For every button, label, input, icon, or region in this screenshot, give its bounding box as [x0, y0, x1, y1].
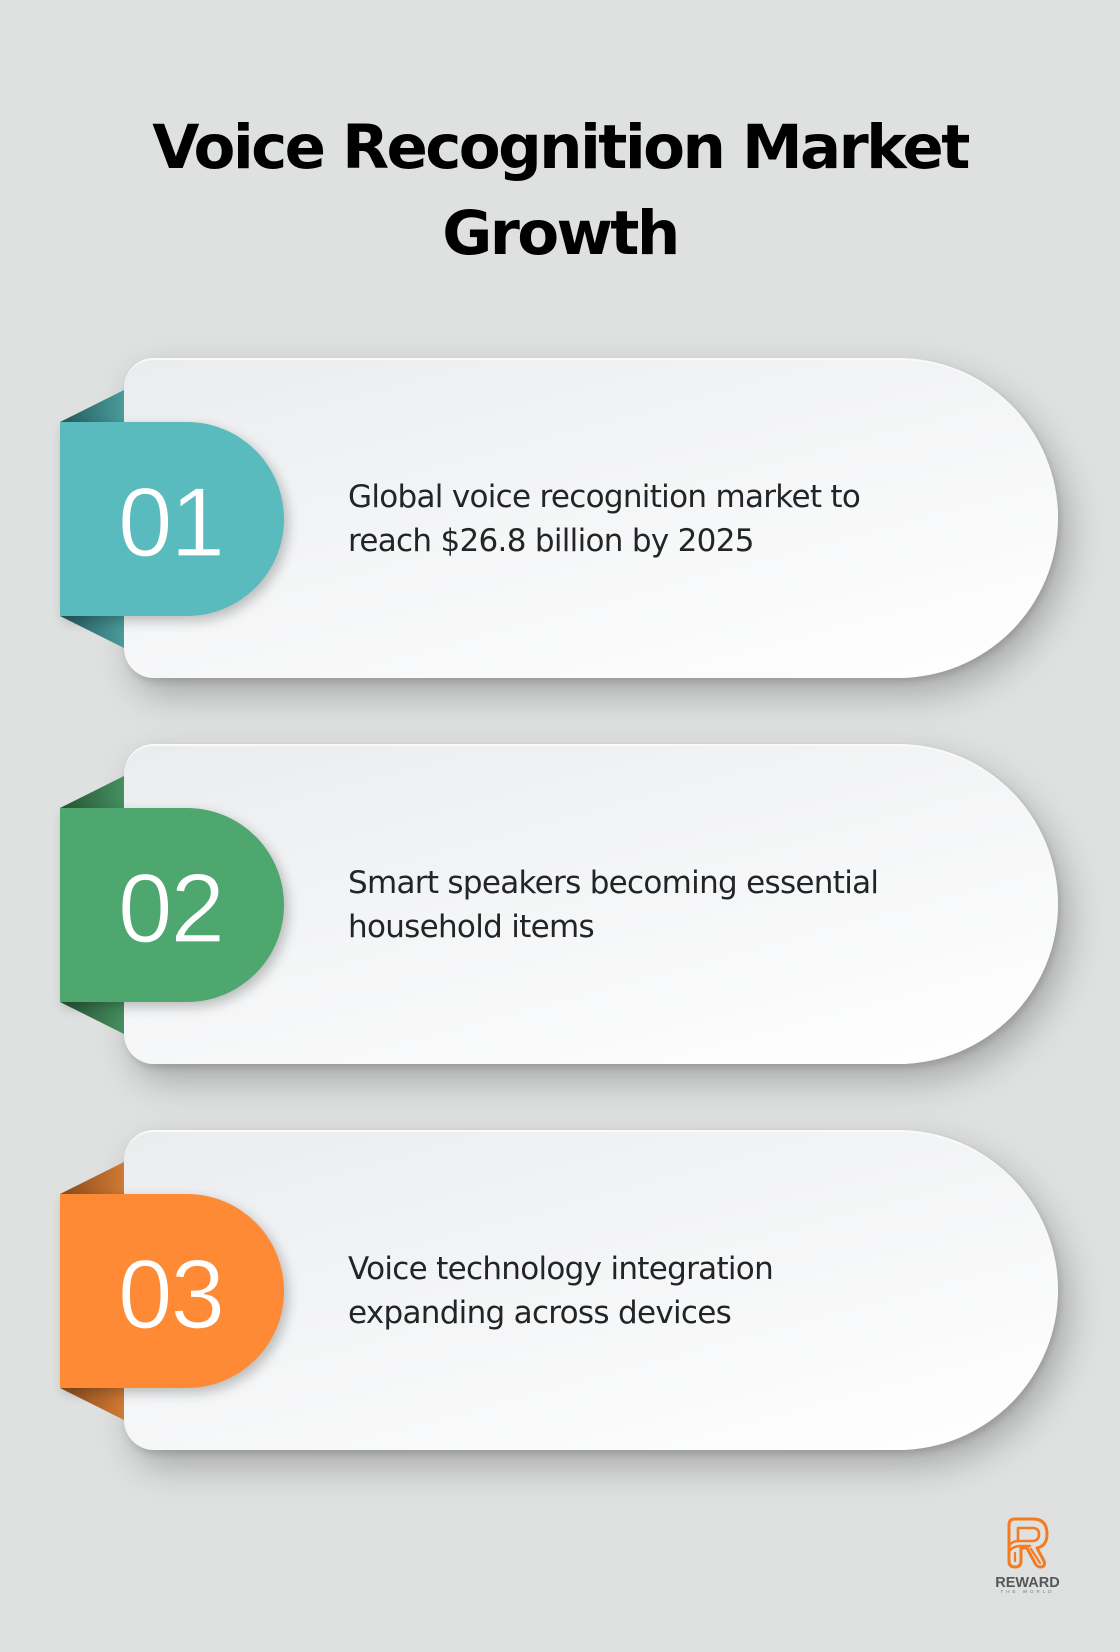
- logo tagline: THE WORLD: [1000, 1589, 1054, 1594]
- badge 01: [60, 422, 284, 616]
- card background 03: [124, 1130, 1058, 1450]
- number 01: 01: [118, 467, 223, 577]
- number 02: 02: [118, 853, 223, 963]
- card background 02: [124, 744, 1058, 1064]
- text 02: household items: [348, 909, 594, 945]
- card background 01: [124, 358, 1058, 678]
- panel: item 03: [58, 1128, 1086, 1484]
- title: Growth: [442, 198, 678, 269]
- panel: item 02: [58, 742, 1086, 1098]
- title: [152, 112, 969, 269]
- number 03: 03: [118, 1239, 223, 1349]
- badge 03: [60, 1194, 284, 1388]
- panel: item 01: [58, 356, 1086, 712]
- text 02: [348, 865, 878, 945]
- text 01: [348, 479, 860, 559]
- badge 02: [60, 808, 284, 1002]
- title: Voice Recognition Market: [152, 112, 968, 183]
- ribbon folds 02: [60, 776, 124, 1034]
- text 03: [348, 1251, 773, 1331]
- text 02: Smart speakers becoming essential: [348, 865, 878, 901]
- text 03: expanding across devices: [348, 1295, 731, 1331]
- logo: Reward the World: [995, 1518, 1060, 1594]
- ribbon folds 01: [60, 390, 124, 648]
- text 01: Global voice recognition market to: [348, 479, 860, 515]
- icon: R mark: [1009, 1519, 1047, 1567]
- logo wordmark: REWARD: [995, 1575, 1060, 1591]
- text 03: Voice technology integration: [348, 1251, 773, 1287]
- text 01: reach $26.8 billion by 2025: [348, 523, 754, 559]
- ribbon folds 03: [60, 1162, 124, 1420]
